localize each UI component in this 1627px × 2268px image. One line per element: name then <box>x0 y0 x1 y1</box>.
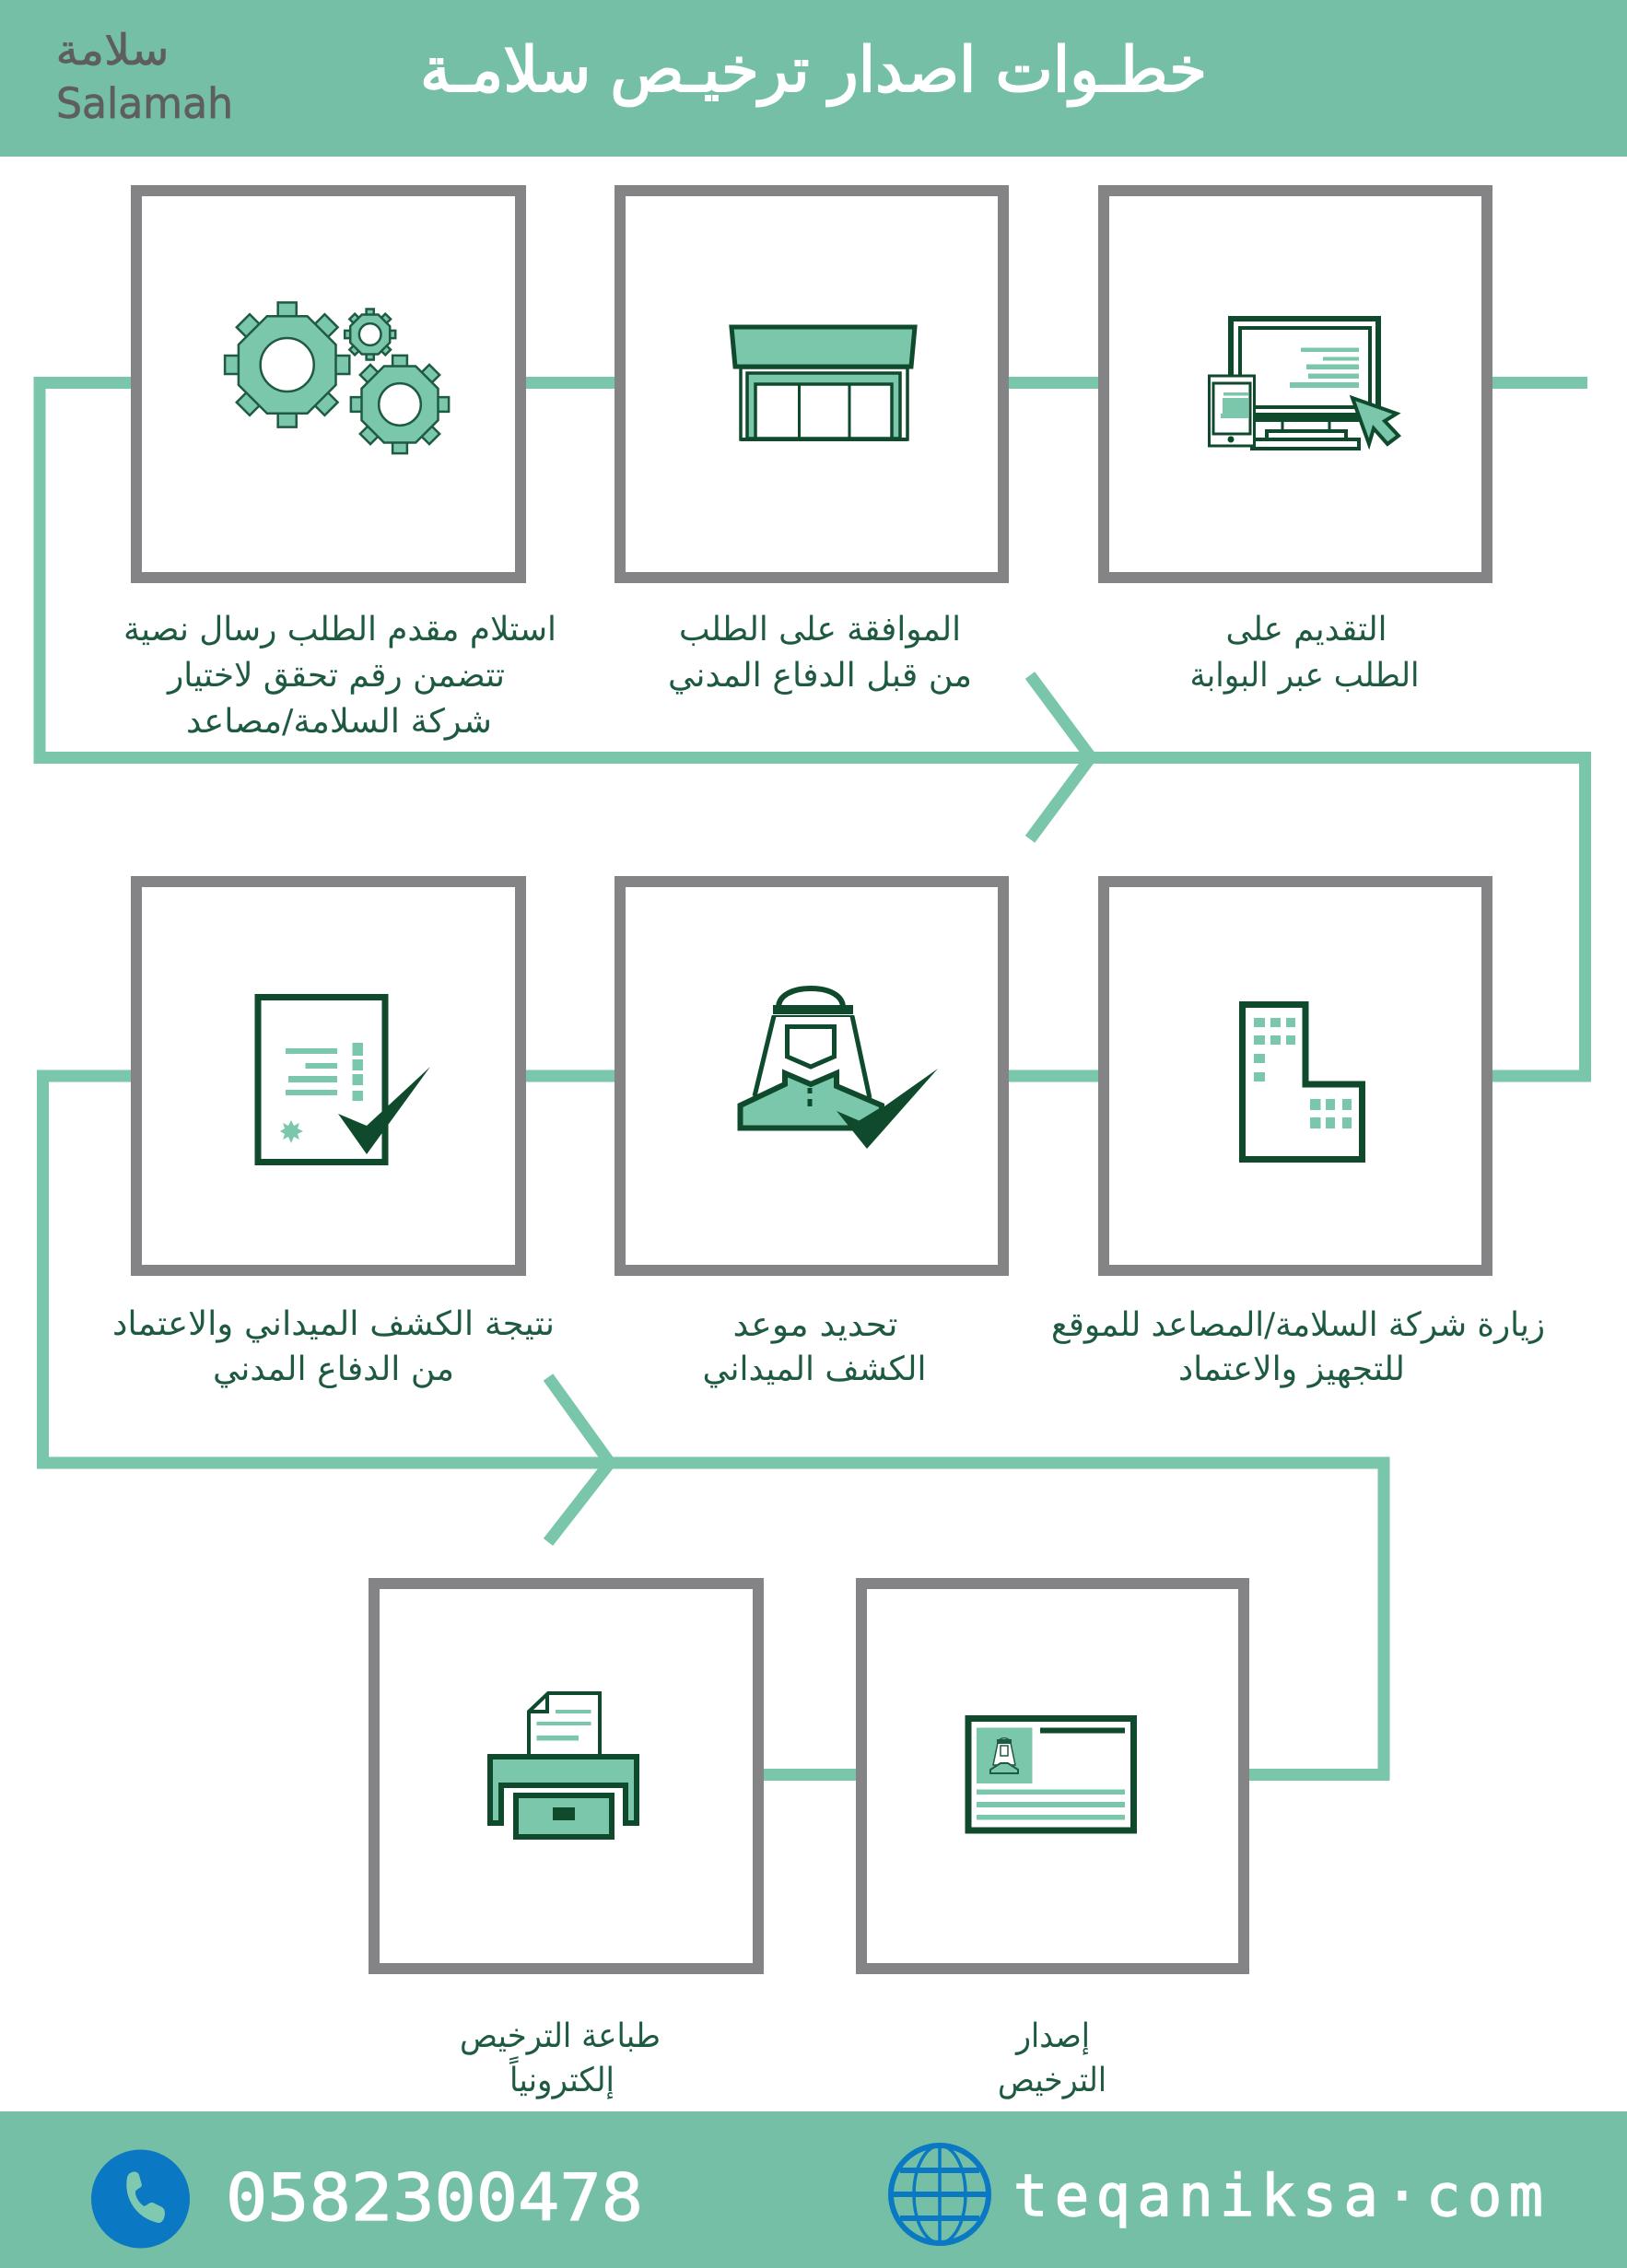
icon: globe <box>891 2145 989 2243</box>
logo: سلامة <box>55 25 170 75</box>
icon: storefront <box>732 327 915 439</box>
panel: step 5 schedule field inspection <box>620 882 1003 1388</box>
flow connector line with chevrons <box>40 383 1587 1774</box>
caption: زيارة شركة السلامة/المصاعد للموقع <box>1051 1306 1545 1344</box>
caption: تتضمن رقم تحقق لاختيار <box>166 657 505 695</box>
caption: الطلب عبر البوابة <box>1190 657 1419 695</box>
footer band <box>0 2111 1627 2268</box>
caption: شركة السلامة/مصاعد <box>186 703 492 741</box>
caption <box>123 611 556 741</box>
panel: step 3 applicant receives SMS <box>123 191 556 741</box>
caption: الترخيص <box>998 2062 1106 2099</box>
panel: step 4 safety company site visit <box>1051 882 1545 1388</box>
caption: التقديم على <box>1225 611 1387 649</box>
icon: phone <box>91 2150 190 2248</box>
panel: step 6 inspection result <box>112 882 555 1388</box>
caption: إلكترونياً <box>509 2056 615 2099</box>
caption <box>1190 611 1419 695</box>
caption <box>702 1306 927 1388</box>
caption: الموافقة على الطلب <box>679 611 961 649</box>
caption <box>460 2017 661 2099</box>
icon: gears <box>225 302 449 453</box>
title: خطـوات اصدار ترخيـص سلامـة <box>420 34 1207 107</box>
panel: step 7 issue licence <box>861 1584 1244 2099</box>
icon: licence card <box>968 1719 1133 1830</box>
panel: step 2 civil defence approval <box>620 191 1003 695</box>
caption: من الدفاع المدني <box>213 1350 454 1388</box>
panel: step 1 apply via portal <box>1104 191 1487 695</box>
caption: للتجهيز والاعتماد <box>1178 1350 1405 1388</box>
caption <box>668 611 972 695</box>
header band <box>0 0 1627 157</box>
caption: نتيجة الكشف الميداني والاعتماد <box>112 1305 555 1343</box>
caption: إصدار <box>1014 2017 1090 2055</box>
icon: computer and phone <box>1209 319 1399 449</box>
icon: person with check <box>741 988 938 1149</box>
caption <box>112 1305 555 1388</box>
icon: printer <box>490 1693 637 1837</box>
website: teqaniksa·com <box>1013 2162 1543 2229</box>
phone number: 0582300478 <box>226 2160 643 2236</box>
caption <box>998 2017 1106 2099</box>
logo: Salamah <box>56 79 233 128</box>
caption <box>1051 1306 1545 1388</box>
icon: building <box>1242 1004 1362 1159</box>
caption: الكشف الميداني <box>702 1350 927 1388</box>
caption: استلام مقدم الطلب رسال نصية <box>123 611 556 649</box>
caption: من قبل الدفاع المدني <box>668 657 972 695</box>
caption: تحديد موعد <box>733 1306 897 1344</box>
caption: طباعة الترخيص <box>460 2017 661 2055</box>
panel: step 8 print licence <box>374 1584 758 2099</box>
icon: report with check <box>258 997 430 1163</box>
logo <box>55 25 233 128</box>
